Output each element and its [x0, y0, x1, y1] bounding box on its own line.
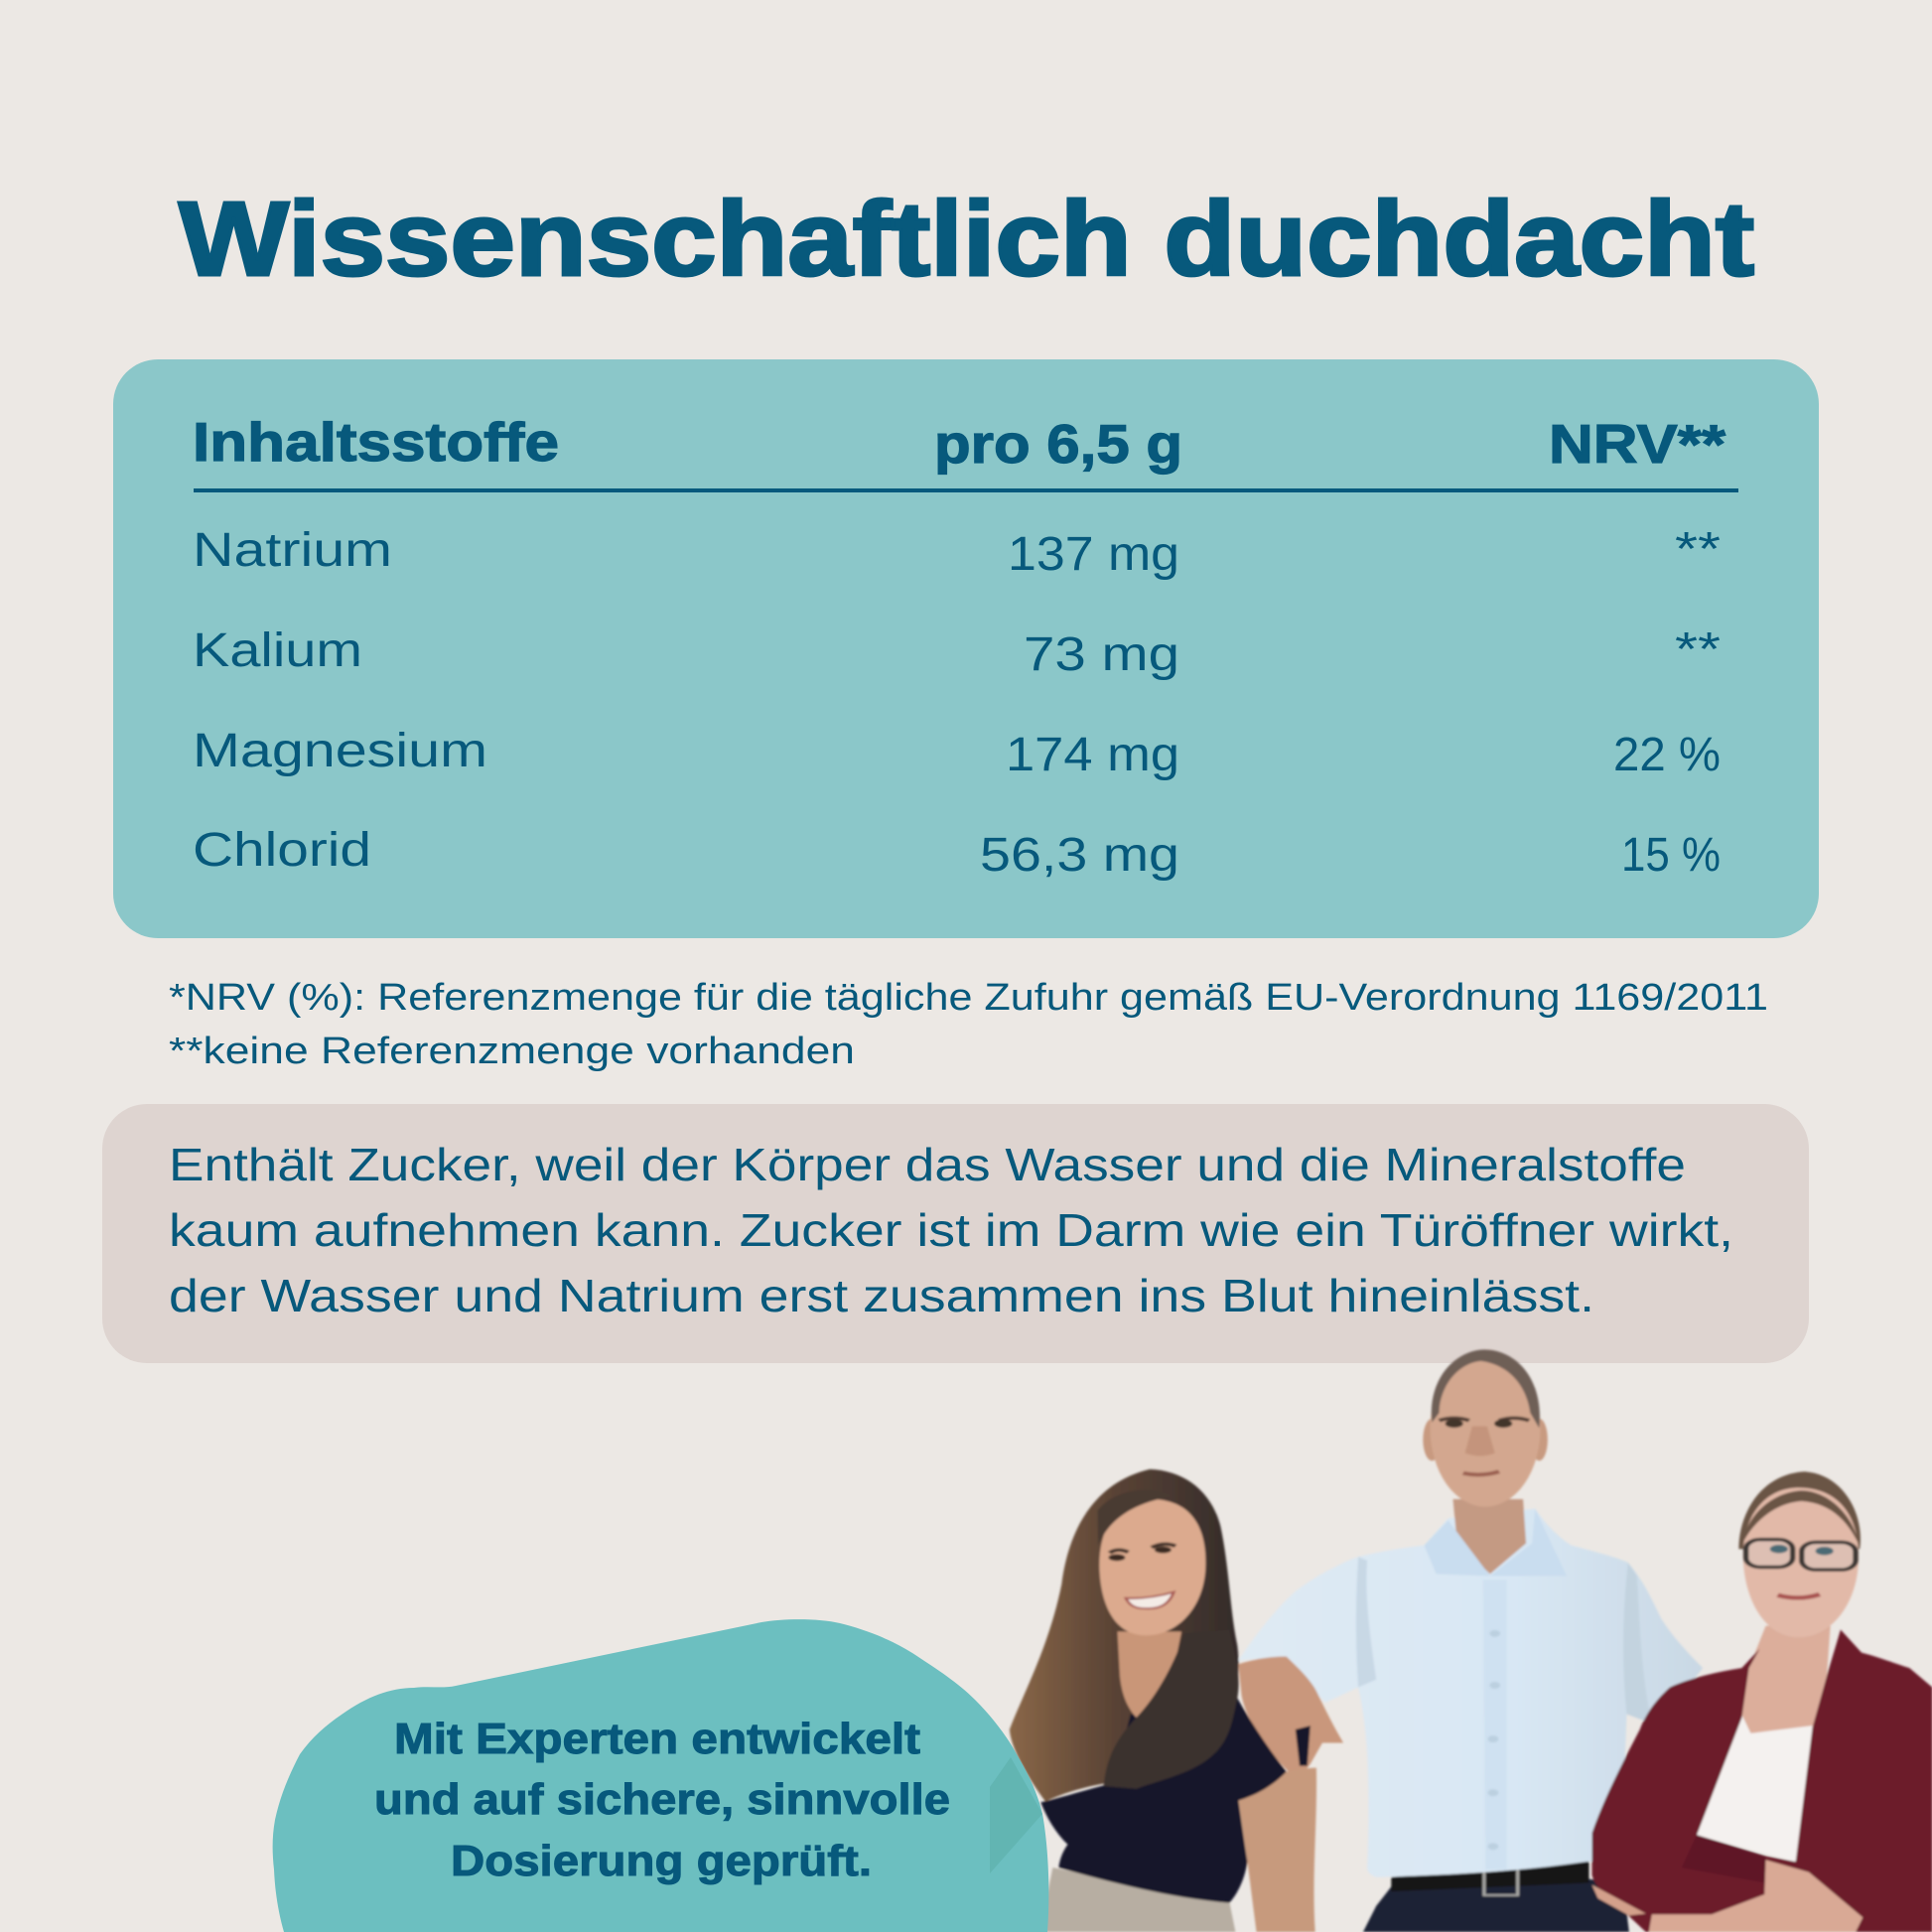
table header row: NRV** [1549, 413, 1726, 475]
table header row [193, 411, 1726, 475]
row: Chlorid [193, 824, 1721, 882]
row: Natrium: 137 mg [1008, 528, 1179, 581]
row: Kalium: 73 mg [1024, 628, 1179, 681]
explanation text: der Wasser und Natrium erst zusammen ins Blut hineinlässt. [169, 1270, 1594, 1321]
table header row: Inhaltsstoffe [193, 411, 559, 473]
title: Wissenschaftlich duchdacht [179, 181, 1754, 298]
person: man in light blue shirt [1238, 1349, 1703, 1932]
row: Magnesium [193, 725, 1721, 781]
row: Natrium [193, 523, 1721, 581]
person: woman with long hair [1010, 1469, 1316, 1932]
row: Magnesium: Magnesium [193, 725, 487, 777]
row: Magnesium: 174 mg [1006, 729, 1179, 781]
row: Kalium: Kalium [193, 624, 362, 677]
callout text: Dosierung geprüft. [451, 1837, 872, 1885]
explanation text: kaum aufnehmen kann. Zucker ist im Darm wie ein Türöffner wirkt, [169, 1204, 1733, 1256]
callout text: Mit Experten entwickelt [394, 1715, 920, 1763]
footnotes: **keine Referenzmenge vorhanden [169, 1031, 855, 1072]
row: Chlorid: 15 % [1621, 829, 1721, 882]
panel: nutrition table [113, 359, 1819, 938]
header rule [194, 488, 1738, 492]
row: Natrium: Natrium [193, 524, 392, 577]
translucent overlap wedge [990, 1757, 1042, 1873]
footnotes: *NRV (%): Referenzmenge für die tägliche Zufuhr gemäß EU-Verordnung 1169/2011 [169, 977, 1768, 1019]
row: Chlorid: Chlorid [193, 824, 371, 877]
callout text: und auf sichere, sinnvolle [374, 1775, 950, 1824]
callout text [374, 1715, 950, 1885]
row: Kalium: ** [1675, 623, 1721, 676]
explanation text: Enthält Zucker, weil der Körper das Wasser und die Mineralstoffe [169, 1139, 1686, 1190]
explanation text [169, 1139, 1733, 1321]
row: Magnesium: 22 % [1613, 729, 1721, 781]
row: Chlorid: 56,3 mg [980, 829, 1179, 882]
row: Natrium: ** [1675, 523, 1721, 576]
panel: sugar explanation [102, 1104, 1809, 1363]
row: Kalium [193, 623, 1721, 681]
person: woman with glasses and red blazer [1592, 1471, 1932, 1932]
footnotes [169, 977, 1768, 1072]
table header row: pro 6,5 g [934, 413, 1182, 475]
photo: three experts [1010, 1349, 1932, 1932]
callout blob: expert statement [273, 1619, 1048, 1932]
